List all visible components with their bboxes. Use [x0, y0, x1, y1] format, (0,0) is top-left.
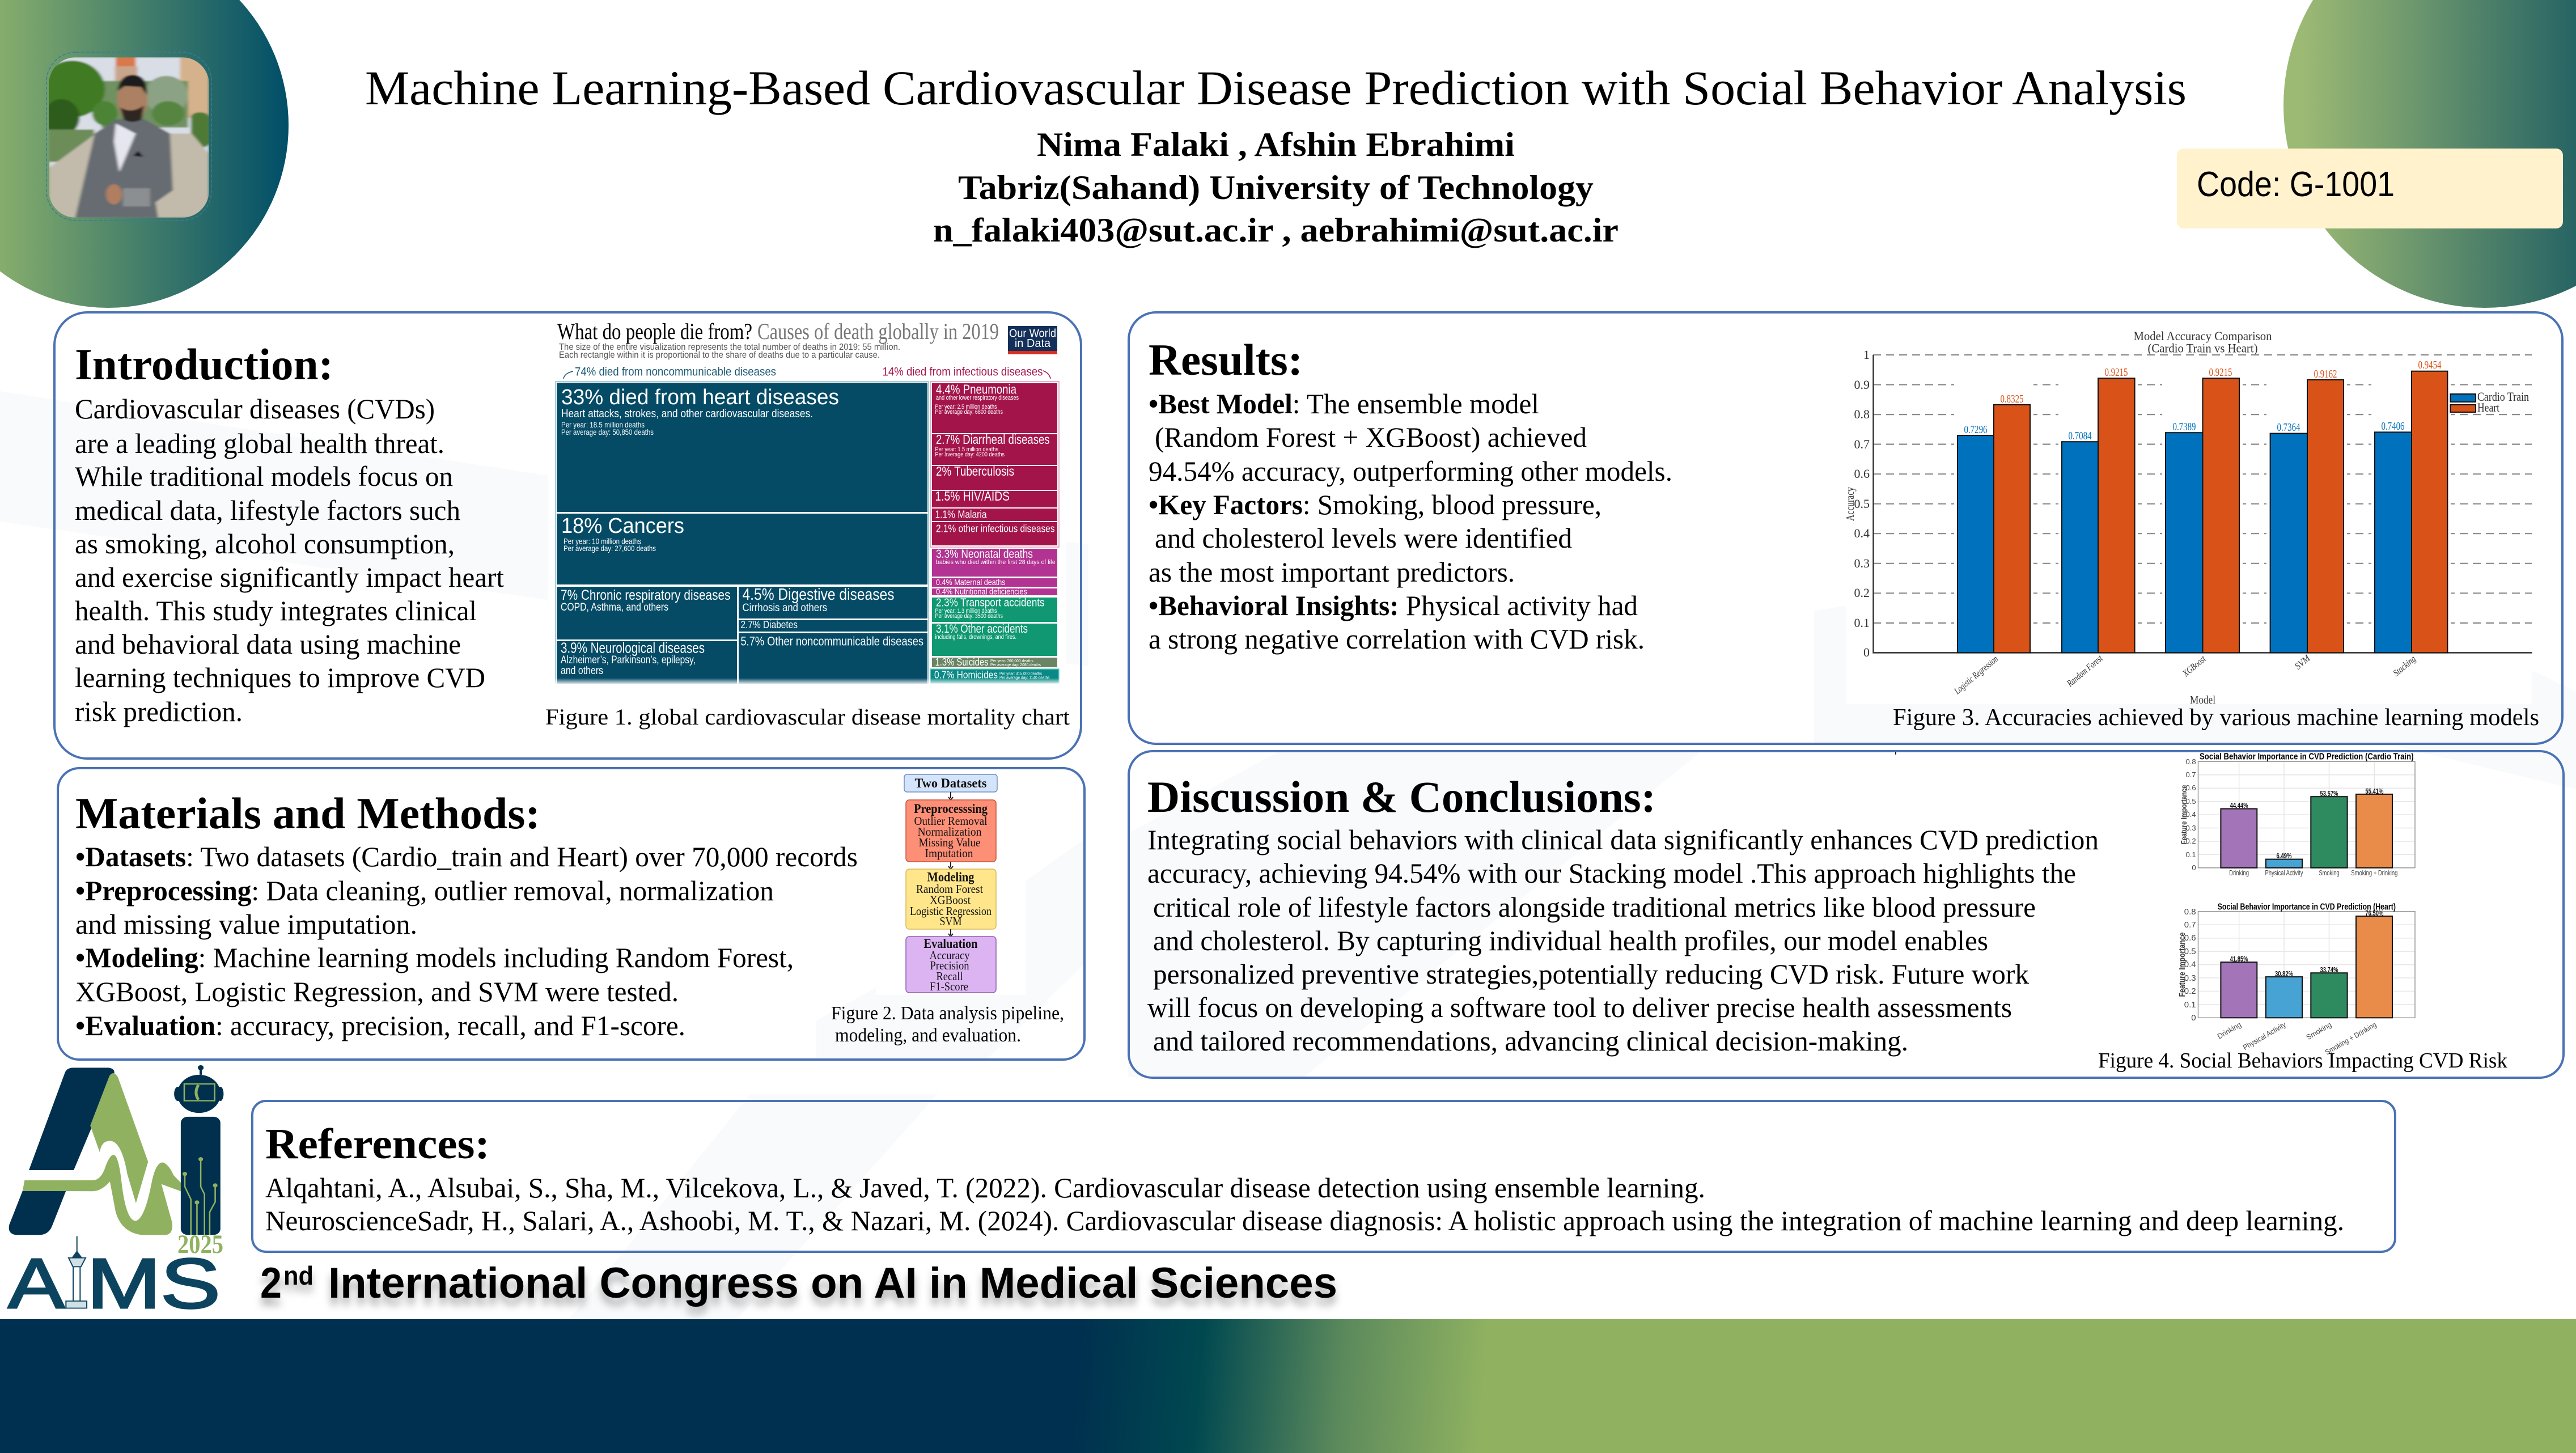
- title: Machine Learning-Based Cardiovascular Disease Prediction with Social Behavior Analysis: [365, 61, 2187, 115]
- treemap labels: Per average day: 3500 deaths: [935, 613, 1003, 620]
- value labels: 41.85%: [2230, 955, 2248, 963]
- figure 2 caption: Figure 2. Data analysis pipeline,: [831, 1003, 1064, 1024]
- value labels: 0.7084: [2068, 430, 2092, 442]
- box: evaluation: Evaluation: [924, 937, 978, 951]
- value labels: [2230, 909, 2384, 978]
- panel: materials and methods: [58, 768, 1084, 1060]
- materials body text: [75, 841, 858, 1041]
- axis ticks: [2186, 757, 2196, 872]
- value labels: 0.7406: [2381, 420, 2405, 433]
- results body text: 94.54% accuracy, outperforming other models.: [1149, 455, 1672, 487]
- results body text: as the most important predictors.: [1149, 556, 1515, 588]
- value labels: 30.82%: [2275, 969, 2293, 978]
- box: evaluation: Recall: [937, 969, 963, 983]
- code badge: [2177, 149, 2563, 228]
- value labels: 0.9162: [2314, 368, 2337, 380]
- axis ticks: 0.2: [2186, 837, 2196, 845]
- reference 1: Alqahtani, A., Alsubai, S., Sha, M., Vilcekova, L., & Javed, T. (2022). Cardiovascular disease detection using ensemble learning.: [265, 1172, 1705, 1204]
- box: modeling: Modeling: [927, 870, 975, 884]
- value labels: 0.7364: [2277, 421, 2300, 434]
- y axis ticks: 1: [1863, 348, 1870, 362]
- axis ticks: 0.5: [2184, 947, 2196, 956]
- y axis ticks: 0.4: [1854, 526, 1870, 540]
- materials body text: and missing value imputation.: [75, 908, 417, 940]
- axis ticks: 0.1: [2184, 1000, 2196, 1010]
- chart title: Model Accuracy Comparison: [2134, 329, 2272, 343]
- treemap title: [557, 319, 999, 360]
- chart: social behavior importance, heart: [2177, 903, 2415, 1057]
- axis ticks: 0.6: [2184, 933, 2196, 943]
- axis ticks: 0.6: [2186, 783, 2196, 792]
- introduction body text: While traditional models focus on: [75, 460, 453, 492]
- treemap title: The size of the entire visualization represents the total number of deaths in 2019: 55 million.: [559, 342, 900, 352]
- maternal and neonatal blocks: [932, 549, 1057, 595]
- axis labels: Drinking: [2229, 869, 2249, 877]
- axis ticks: 0.2: [2184, 986, 2196, 996]
- treemap labels: Per year: 10 million deaths: [564, 536, 641, 545]
- introduction body text: and behavioral data using machine: [75, 628, 461, 660]
- value labels: [1964, 359, 2441, 442]
- treemap labels: Per year: 1.3 million deaths: [935, 608, 997, 615]
- treemap labels: 7% Chronic respiratory diseases: [561, 587, 730, 603]
- treemap labels: Per average day: 50,850 deaths: [561, 427, 654, 437]
- value labels: [2230, 787, 2384, 860]
- introduction body text: medical data, lifestyle factors such: [75, 494, 460, 526]
- logo: AIMS congress: [8, 1065, 223, 1323]
- treemap labels: Per year: 415,000 deaths: [999, 672, 1042, 676]
- right header circle: [2283, 0, 2576, 308]
- box: preprocessing: Imputation: [925, 846, 973, 860]
- value labels: 0.9215: [2104, 366, 2128, 379]
- axis labels: Smoking + Drinking: [2324, 1020, 2378, 1057]
- our world in data logo: Our World: [1009, 328, 1056, 340]
- introduction body text: [75, 393, 504, 727]
- axis labels: Feature Importance: [2179, 785, 2188, 844]
- treemap labels: 3.1% Other accidents: [936, 622, 1028, 636]
- x axis labels: XGBoost: [2180, 653, 2208, 679]
- arrow: [948, 792, 953, 800]
- box: evaluation: Accuracy: [930, 948, 970, 962]
- logo wordmark: S: [160, 1244, 221, 1323]
- left header circle: [0, 0, 289, 308]
- reference 2: NeuroscienceSadr, H., Salari, A., Ashoobi, M. T., & Nazari, M. (2024). Cardiovascular disease diagnosis: A holistic approach using the integration of machine learning and deep learning.: [265, 1205, 2344, 1236]
- results body text: •Behavioral Insights: Physical activity had: [1149, 590, 1638, 621]
- discussion body text: will focus on developing a software tool to deliver precise health assessments: [1147, 992, 2012, 1023]
- figure 2 caption: [831, 1003, 1064, 1046]
- discussion body text: Integrating social behaviors with clinical data significantly enhances CVD prediction: [1147, 824, 2099, 855]
- logo wordmark: A: [8, 1244, 65, 1323]
- value labels: 0.9454: [2418, 359, 2441, 371]
- box: modeling: XGBoost: [930, 893, 971, 907]
- bars: [2221, 794, 2392, 868]
- y axis title: Accuracy: [1844, 487, 1857, 521]
- treemap labels: 5.7% Other noncommunicable diseases: [740, 634, 923, 649]
- bars: heart: [1994, 371, 2447, 653]
- logo robot i: [174, 1065, 223, 1235]
- background swooshes: [0, 391, 2576, 1319]
- infectious label with arrow: 14% died from infectious diseases: [882, 365, 1043, 379]
- materials body text: •Modeling: Machine learning models including Random Forest,: [75, 942, 794, 973]
- treemap labels: Per year: 760,000 deaths: [990, 659, 1033, 663]
- logo tower: [66, 1236, 87, 1308]
- treemap labels: and others: [561, 665, 603, 677]
- box: two datasets: [904, 774, 997, 792]
- chart title: (Cardio Train vs Heart): [2147, 341, 2257, 355]
- panel: references: [252, 1101, 2395, 1252]
- treemap labels: 3.3% Neonatal deaths: [936, 548, 1033, 561]
- axis ticks: 0.5: [2186, 797, 2196, 806]
- value labels: 0.7389: [2172, 421, 2196, 433]
- treemap labels: [561, 382, 1056, 680]
- introduction body text: and exercise significantly impact heart: [75, 561, 504, 593]
- author photo: [40, 52, 211, 221]
- treemap labels: 4.4% Pneumonia: [936, 382, 1016, 397]
- box: evaluation: Precision: [930, 959, 969, 972]
- box: preprocessing: Outlier Removal: [914, 814, 988, 828]
- infectious blocks: [932, 383, 1057, 545]
- heading: discussion and conclusions: Discussion & Conclusions:: [1147, 772, 1656, 821]
- x axis labels: [1952, 653, 2418, 697]
- introduction body text: as smoking, alcohol consumption,: [75, 528, 455, 560]
- axis labels: Smoking + Drinking: [2351, 869, 2397, 877]
- axis labels: Physical Activity: [2265, 869, 2303, 877]
- treemap labels: Per year: 18.5 million deaths: [561, 420, 645, 429]
- treemap labels: 2.7% Diarrheal diseases: [936, 432, 1050, 447]
- axis ticks: 0.8: [2186, 757, 2196, 766]
- y axis ticks: [1854, 348, 1870, 659]
- discussion body text: and cholesterol. By capturing individual health profiles, our model enables: [1153, 925, 1988, 956]
- treemap labels: COPD, Asthma, and others: [561, 601, 668, 613]
- axis labels: [2179, 785, 2397, 877]
- noncommunicable blocks: [557, 383, 927, 684]
- chart: social behavior importance, cardio train: [2179, 752, 2415, 877]
- introduction body text: health. This study integrates clinical: [75, 595, 477, 626]
- results body text: [1149, 388, 1672, 655]
- y axis ticks: 0.1: [1854, 616, 1870, 630]
- treemap labels: 18% Cancers: [561, 514, 684, 538]
- chart title: [2134, 329, 2272, 355]
- figure 4 caption: Figure 4. Social Behaviors Impacting CVD Risk: [2098, 1049, 2507, 1073]
- panel: discussion and conclusions: [1129, 751, 2564, 1078]
- noncommunicable label with arrow: 74% died from noncommunicable diseases: [575, 365, 776, 379]
- treemap title: Causes of death globally in 2019: [757, 319, 999, 344]
- axis labels: Drinking: [2216, 1020, 2243, 1041]
- treemap labels: 2.7% Diabetes: [740, 619, 798, 630]
- axis ticks: 0.8: [2184, 907, 2196, 917]
- value labels: 33.74%: [2320, 965, 2338, 974]
- chart title: Social Behavior Importance in CVD Prediction (Cardio Train): [2200, 752, 2414, 762]
- treemap labels: 1.1% Malaria: [935, 509, 987, 520]
- value labels: 0.8325: [2000, 393, 2024, 405]
- legend: [2450, 389, 2529, 414]
- y axis ticks: 0.8: [1854, 407, 1870, 421]
- axis ticks: 0.3: [2184, 973, 2196, 983]
- treemap title: Each rectangle within it is proportional to the share of deaths due to a particular cause.: [559, 350, 880, 360]
- box: modeling: SVM: [940, 914, 962, 928]
- treemap labels: 33% died from heart diseases: [561, 386, 839, 409]
- introduction body text: learning techniques to improve CVD: [75, 662, 485, 693]
- x axis labels: Stacking: [2391, 654, 2418, 679]
- treemap labels: babies who died within the first 28 days of life: [936, 559, 1056, 566]
- treemap labels: Cirrhosis and others: [743, 602, 827, 614]
- our world in data logo: [1008, 326, 1057, 354]
- axis labels: [2177, 932, 2378, 1057]
- axis ticks: 0.7: [2186, 770, 2196, 779]
- treemap labels: 4.5% Digestive diseases: [743, 586, 895, 604]
- axis labels: Physical Activity: [2242, 1020, 2287, 1052]
- panel: introduction: [54, 312, 1081, 759]
- value labels: 0.9215: [2209, 366, 2232, 379]
- box: evaluation: [906, 937, 996, 993]
- introduction body text: risk prediction.: [75, 696, 243, 727]
- axis ticks: 0: [2192, 863, 2196, 872]
- axis labels: Feature Importance: [2177, 932, 2187, 997]
- axis ticks: 0.4: [2186, 810, 2196, 819]
- figure 1 caption: Figure 1. global cardiovascular disease mortality chart: [545, 704, 1070, 730]
- box: modeling: Random Forest: [916, 882, 983, 896]
- figure 2 caption: modeling, and evaluation.: [835, 1025, 1021, 1046]
- box: preprocessing: Normalization: [917, 825, 982, 838]
- treemap labels: Per year: 2.5 million deaths: [935, 404, 997, 410]
- figure 3 caption: Figure 3. Accuracies achieved by various machine learning models: [1893, 705, 2539, 731]
- treemap labels: Heart attacks, strokes, and other cardiovascular diseases.: [561, 408, 813, 420]
- treemap labels: 0.4% Nutritional deficiencies: [936, 587, 1027, 597]
- heading: introduction: Introduction:: [75, 340, 333, 389]
- axis labels: Smoking: [2304, 1020, 2333, 1041]
- congress name: 2: [260, 1259, 282, 1307]
- emails: n_falaki403@sut.ac.ir , aebrahimi@sut.ac.ir: [933, 211, 1619, 249]
- axis ticks: [2184, 907, 2196, 1023]
- discussion body text: personalized preventive strategies,potentially reducing CVD risk. Future work: [1153, 958, 2029, 990]
- treemap labels: 3.9% Neurological diseases: [561, 639, 705, 656]
- heading: materials and methods: Materials and Methods:: [75, 789, 540, 838]
- value labels: 0.7296: [1964, 423, 1988, 436]
- value labels: 53.57%: [2320, 789, 2338, 798]
- treemap labels: 0.7% Homicides: [934, 669, 998, 680]
- results body text: a strong negative correlation with CVD risk.: [1149, 623, 1645, 655]
- box: preprocessing: [906, 800, 996, 862]
- treemap labels: and other lower respiratory diseases: [936, 395, 1019, 401]
- heading: results: Results:: [1149, 335, 1303, 384]
- logo letter A: [9, 1067, 182, 1235]
- treemap labels: including falls, drownings, and fires.: [935, 634, 1016, 641]
- x axis labels: Random Forest: [2065, 653, 2105, 689]
- arrow: [948, 862, 953, 869]
- bars: cardio train: [1958, 432, 2412, 653]
- y axis ticks: 0.2: [1854, 586, 1870, 600]
- value labels: 6.49%: [2277, 852, 2292, 860]
- x axis labels: Logistic Regression: [1952, 654, 2000, 697]
- axis ticks: 0.7: [2184, 920, 2196, 930]
- chart: data analysis pipeline: [876, 771, 1026, 995]
- bars: [2221, 916, 2392, 1018]
- our world in data logo: in Data: [1015, 337, 1051, 350]
- treemap labels: 1.3% Suicides: [935, 656, 989, 668]
- y axis ticks: 0.9: [1854, 378, 1870, 392]
- treemap labels: Per average day: 1140 deaths: [999, 676, 1050, 680]
- chart title: Social Behavior Importance in CVD Prediction (Heart): [2218, 903, 2396, 912]
- code badge: Code: G-1001: [2197, 165, 2395, 204]
- treemap labels: Per average day: 2080 deaths: [990, 663, 1041, 667]
- treemap labels: 2% Tuberculosis: [936, 464, 1014, 478]
- box: evaluation: F1-Score: [930, 980, 968, 993]
- box: preprocessing: Preprocesssing: [914, 802, 988, 816]
- authors: Nima Falaki , Afshin Ebrahimi: [1037, 126, 1515, 163]
- affiliation: Tabriz(Sahand) University of Technology: [958, 169, 1594, 206]
- y axis ticks: 0.6: [1854, 467, 1870, 481]
- injury blocks: [932, 598, 1057, 667]
- axis labels: Smoking: [2319, 869, 2339, 877]
- treemap labels: 2.1% other infectious diseases: [936, 523, 1054, 534]
- box: modeling: [906, 869, 996, 929]
- x axis title: Model: [2190, 694, 2215, 706]
- discussion body text: and tailored recommendations, advancing clinical decision-making.: [1153, 1025, 1908, 1057]
- legend: Heart: [2477, 400, 2499, 414]
- treemap labels: 2.3% Transport accidents: [936, 597, 1044, 609]
- results body text: •Key Factors: Smoking, blood pressure,: [1149, 489, 1601, 520]
- axis ticks: 0: [2191, 1013, 2196, 1023]
- results body text: (Random Forest + XGBoost) achieved: [1155, 421, 1587, 453]
- value labels: 44.44%: [2230, 801, 2248, 810]
- introduction body text: Cardiovascular diseases (CVDs): [75, 393, 435, 425]
- treemap labels: Per average day: 6800 deaths: [935, 409, 1003, 416]
- discussion body text: critical role of lifestyle factors alongside traditional metrics like blood pressure: [1153, 891, 2036, 923]
- y axis ticks: 0.3: [1854, 556, 1870, 570]
- treemap labels: Per average day: 4200 deaths: [935, 451, 1005, 458]
- congress name: nd: [283, 1261, 313, 1290]
- value labels: 76.50%: [2365, 909, 2384, 917]
- y axis ticks: 0: [1863, 645, 1870, 659]
- congress name: International Congress on AI in Medical Sciences: [328, 1259, 1337, 1307]
- box: modeling: Logistic Regression: [910, 904, 992, 918]
- discussion body text: [1147, 824, 2099, 1057]
- axis ticks: 0.4: [2184, 960, 2196, 969]
- treemap labels: Alzheimer’s, Parkinson’s, epilepsy,: [561, 654, 696, 666]
- arrow: [948, 929, 953, 937]
- treemap labels: Per year: 1.5 million deaths: [935, 446, 998, 453]
- treemap labels: 0.4% Maternal deaths: [936, 578, 1006, 587]
- box: two datasets: Two Datasets: [915, 776, 987, 790]
- introduction body text: are a leading global health threat.: [75, 427, 444, 459]
- chart: causes of death treemap: [548, 319, 1066, 687]
- treemap labels: 1.5% HIV/AIDS: [935, 489, 1010, 503]
- y axis ticks: 0.7: [1854, 437, 1870, 451]
- results body text: •Best Model: The ensemble model: [1149, 388, 1539, 420]
- materials body text: •Preprocessing: Data cleaning, outlier removal, normalization: [75, 875, 774, 906]
- axis ticks: 0.3: [2186, 824, 2196, 832]
- results body text: and cholesterol levels were identified: [1155, 522, 1572, 554]
- logo year: 2025: [177, 1230, 223, 1259]
- logo wordmark: M: [87, 1244, 161, 1323]
- logo wordmark: [8, 1244, 221, 1323]
- legend: Cardio Train: [2477, 389, 2529, 404]
- materials body text: •Evaluation: accuracy, precision, recall, and F1-score.: [75, 1010, 685, 1041]
- panel: results: [1129, 312, 2562, 744]
- box: preprocessing: Missing Value: [918, 836, 981, 849]
- y axis ticks: 0.5: [1854, 497, 1870, 511]
- materials body text: •Datasets: Two datasets (Cardio_train and Heart) over 70,000 records: [75, 841, 858, 872]
- materials body text: XGBoost, Logistic Regression, and SVM were tested.: [75, 976, 679, 1007]
- heading: references: References:: [265, 1120, 490, 1168]
- x axis labels: SVM: [2293, 653, 2312, 672]
- axis ticks: 0.1: [2186, 850, 2196, 859]
- value labels: 55.41%: [2365, 787, 2384, 795]
- chart: model accuracy comparison: [1844, 323, 2532, 706]
- bottom gradient band: [0, 1319, 2576, 1453]
- discussion body text: accuracy, achieving 94.54% with our Stacking model .This approach highlights the: [1147, 857, 2076, 889]
- treemap labels: Per average day: 27,600 deaths: [564, 544, 656, 553]
- treemap title: What do people die from?: [557, 319, 752, 344]
